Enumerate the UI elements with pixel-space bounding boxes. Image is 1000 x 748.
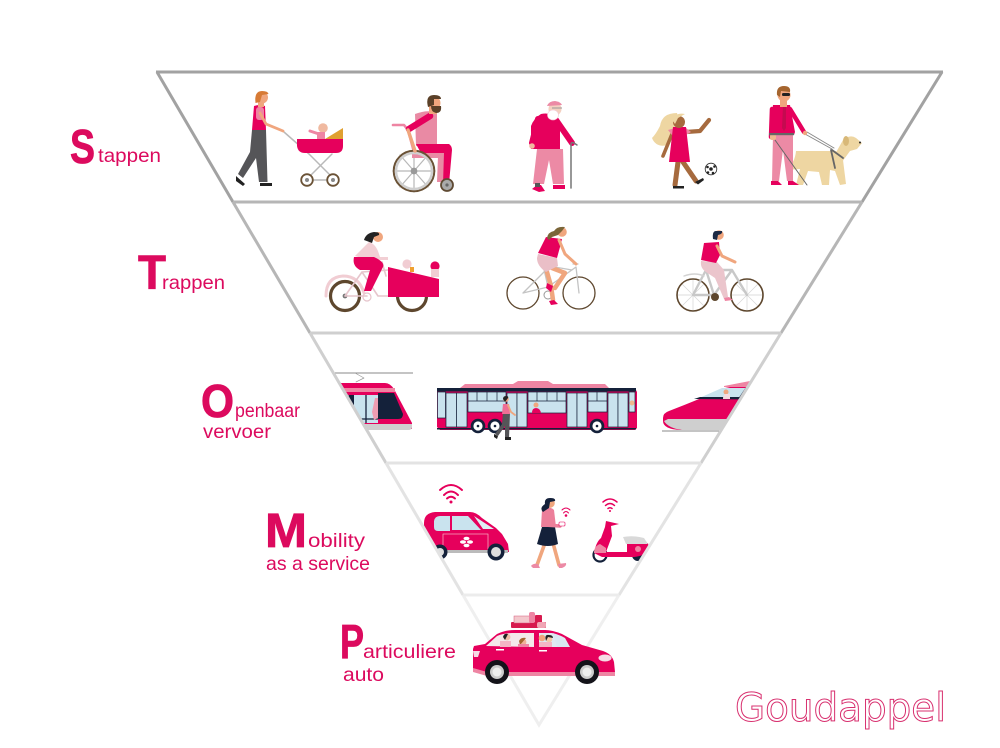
funnel outline <box>156 72 943 595</box>
label: Openbaar vervoer: penbaar <box>235 400 300 422</box>
icon: wifi near phone <box>562 508 570 516</box>
label: Trappen: T <box>138 247 166 300</box>
figure: pedestrian passing bus <box>494 396 515 440</box>
label: Mobility as a service <box>265 505 370 575</box>
label: Trappen: rappen <box>162 272 225 294</box>
label: Openbaar vervoer: O <box>201 375 234 427</box>
funnel tip <box>463 595 619 725</box>
label: Particuliere auto: auto <box>343 664 384 686</box>
label: Stappen: S <box>70 121 95 174</box>
figure: blind man with guide dog <box>769 86 862 185</box>
vehicle: tram <box>335 373 413 430</box>
vehicle: shared scooter <box>594 521 649 562</box>
label: Mobility as a service: obility <box>308 530 365 552</box>
vehicle: shared car with wifi <box>424 512 509 560</box>
vehicle: bus <box>437 381 637 433</box>
label: Particuliere auto: P <box>340 616 364 669</box>
figure: woman on bicycle <box>507 227 595 309</box>
figure: woman with phone <box>531 498 566 568</box>
label: Stappen <box>70 121 161 174</box>
icon: wifi above scooter <box>603 499 617 512</box>
label: Mobility as a service: M <box>265 505 307 558</box>
figure: parent with stroller <box>236 91 343 186</box>
figure: girl kicking ball <box>652 113 717 188</box>
label: Particuliere auto <box>340 616 456 686</box>
vehicle: private car with luggage <box>473 612 615 684</box>
label: Particuliere auto: articuliere <box>363 641 456 663</box>
label: Openbaar vervoer: vervoer <box>203 421 272 443</box>
logo: Goudappel: Goudappel <box>735 686 946 731</box>
label: Openbaar vervoer <box>201 375 300 443</box>
icon: wifi above car <box>440 485 462 504</box>
vehicle: high-speed train <box>662 381 760 431</box>
figure: wheelchair user <box>393 95 453 192</box>
label: Mobility as a service: as a service <box>266 553 370 575</box>
label: Trappen <box>138 247 225 300</box>
figure: cargo bike with children <box>326 232 440 310</box>
figure: elderly person with cane <box>529 101 577 192</box>
figure: man on bicycle <box>677 230 763 311</box>
label: Stappen: tappen <box>98 145 161 167</box>
